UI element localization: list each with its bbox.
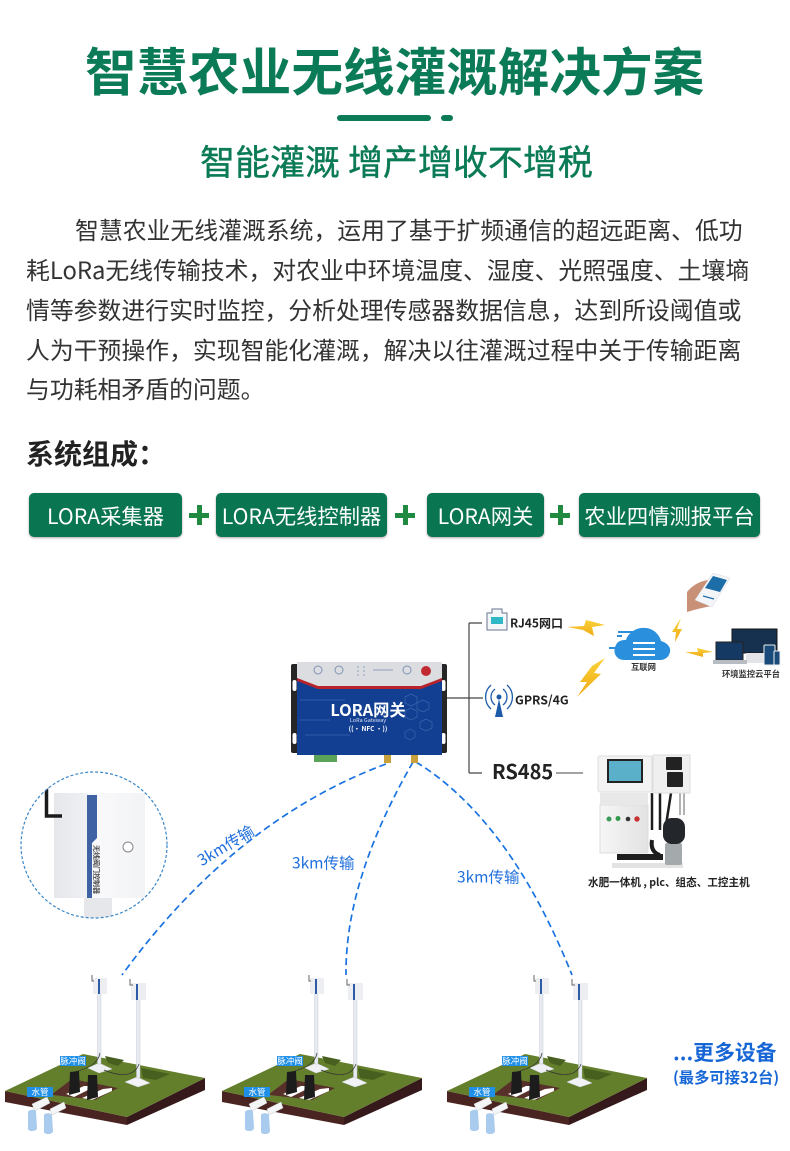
button: LORA gateway: LORA网关 xyxy=(438,500,533,531)
field unit 3 xyxy=(447,975,647,1134)
LORA gateway device xyxy=(291,662,447,763)
controller label: 无线阀门控制器 xyxy=(91,845,101,894)
intro paragraph: 情等参数进行实时监控，分析处理传感器数据信息，达到所设阈值或 xyxy=(26,291,741,326)
button: LORA wireless controller xyxy=(216,493,387,537)
button: agricultural monitoring platform xyxy=(579,493,760,537)
field unit 1: 脉冲阀 xyxy=(60,1055,86,1067)
LORA gateway device: LoRa Gateway xyxy=(350,716,386,724)
cloud: internet: 互联网 xyxy=(631,661,656,673)
button: LORA collector: LORA采集器 xyxy=(47,500,164,531)
field unit 1 xyxy=(5,975,205,1134)
monitoring platform screens: 环境监控云平台 xyxy=(722,668,780,680)
system diagram xyxy=(5,572,780,1134)
section heading: system composition: 系统组成： xyxy=(26,433,166,473)
field unit 2 xyxy=(222,975,422,1134)
label: 3km link 1: 3km传输 xyxy=(193,819,258,871)
intro paragraph: 耗LoRa无线传输技术，对农业中环境温度、湿度、光照强度、土壤墒 xyxy=(26,251,749,286)
field unit 1: 水管 xyxy=(31,1086,49,1098)
tag: water pipe xyxy=(469,1087,495,1097)
transmission link 2 xyxy=(346,762,413,975)
component buttons row xyxy=(28,492,762,540)
RS485 label xyxy=(492,756,583,785)
intro paragraph: 智慧农业无线灌溉系统，运用了基于扩频通信的超远距离、低功 xyxy=(75,211,743,246)
phone with hand xyxy=(687,573,730,612)
tag: water pipe xyxy=(27,1087,53,1097)
cloud: internet xyxy=(609,628,670,673)
transmission link 3 xyxy=(416,762,572,975)
more devices note: (最多可接32台) xyxy=(673,1066,779,1088)
water-fertilizer machine xyxy=(588,755,750,890)
label: 3km link 3: 3km传输 xyxy=(457,866,520,888)
button: LORA gateway xyxy=(427,493,544,537)
title: 智慧农业无线灌溉解决方案 xyxy=(85,31,704,106)
plus sign xyxy=(550,505,570,525)
title underline xyxy=(337,115,453,121)
field unit 3: 脉冲阀 xyxy=(502,1055,528,1067)
intro paragraph: 人为干预操作，实现智能化灌溉，解决以往灌溉过程中关于传输距离 xyxy=(26,331,741,366)
more devices note: ...更多设备 xyxy=(673,1036,777,1066)
subtitle: 智能灌溉 增产增收不增税 xyxy=(200,135,593,186)
RJ45 port: RJ45网口 xyxy=(510,614,563,632)
field unit 2: 水管 xyxy=(248,1086,266,1098)
button: LORA wireless controller: LORA无线控制器 xyxy=(222,500,381,531)
button: agricultural monitoring platform: 农业四情测报平台 xyxy=(584,500,755,531)
field unit 2: 脉冲阀 xyxy=(277,1055,303,1067)
RS485 label: RS485 xyxy=(492,756,553,785)
more devices note xyxy=(673,1036,779,1088)
connector lines xyxy=(447,623,483,773)
gateway name: LORA网关 xyxy=(330,697,406,721)
LORA gateway device: ((• NFC •)) xyxy=(349,723,387,733)
GPRS/4G antenna xyxy=(486,685,569,717)
plus sign xyxy=(395,505,415,525)
tag: pulse valve xyxy=(60,1056,86,1066)
GPRS/4G antenna: GPRS/4G xyxy=(515,690,569,708)
machine caption: 水肥一体机 , plc、组态、工控主机 xyxy=(588,875,750,890)
tag: pulse valve xyxy=(277,1056,303,1066)
wireless valve controller close-up xyxy=(21,772,167,920)
lightning bolts xyxy=(567,618,713,697)
tag: water pipe xyxy=(244,1087,270,1097)
monitoring platform screens xyxy=(713,629,780,680)
field unit 3: 水管 xyxy=(473,1086,491,1098)
label: 3km link 2: 3km传输 xyxy=(292,852,355,874)
transmission link 1 xyxy=(122,764,386,975)
intro paragraph: 与功耗相矛盾的问题。 xyxy=(26,370,264,405)
RJ45 port xyxy=(487,609,563,632)
tag: pulse valve xyxy=(502,1056,528,1066)
intro paragraph xyxy=(26,211,749,405)
plus sign xyxy=(189,505,209,525)
button: LORA collector xyxy=(29,493,182,537)
